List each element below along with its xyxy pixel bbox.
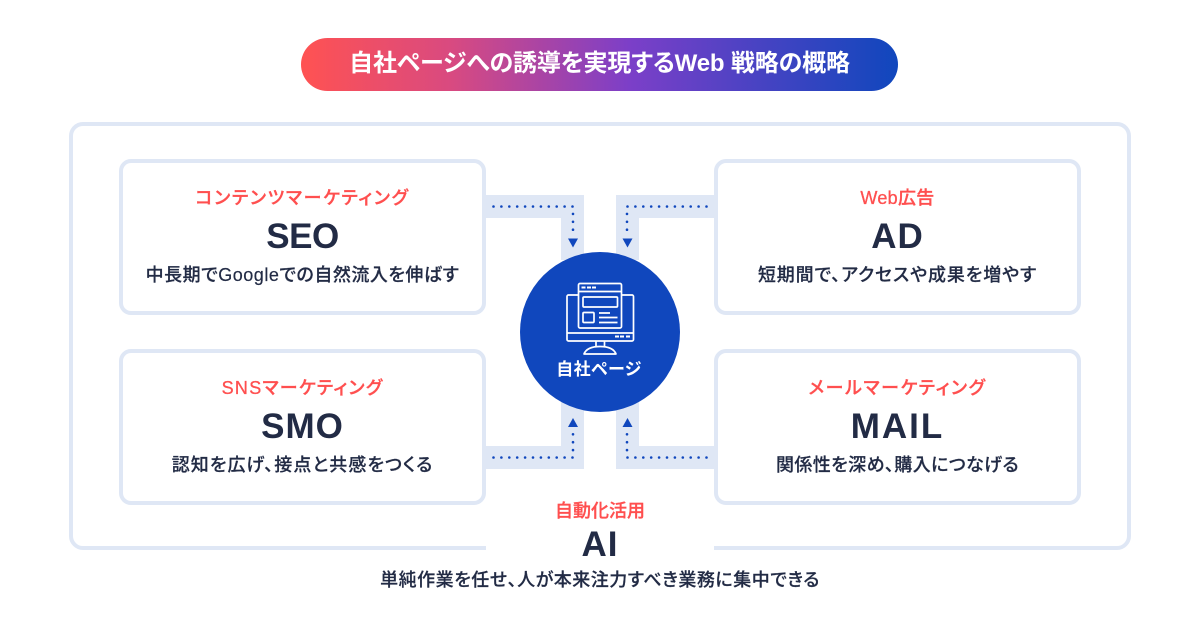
AI block bbox=[380, 501, 820, 590]
card: AD: Web広告 bbox=[860, 188, 935, 208]
card: SMO bbox=[119, 349, 486, 505]
card: SMO: SMO bbox=[261, 407, 344, 446]
card: SEO: 中長期でGoogleでの自然流入を伸ばす bbox=[146, 265, 459, 285]
card: SMO: 認知を広げ、接点と共感をつくる bbox=[172, 455, 433, 475]
AI description: 単純作業を任せ、人が本来注力すべき業務に集中できる bbox=[380, 570, 820, 590]
title pill: 自社ページへの誘導を実現するWeb 戦略の概略 bbox=[349, 50, 850, 77]
card: SMO: SNSマーケティング bbox=[222, 378, 383, 398]
card: MAIL: MAIL bbox=[851, 407, 944, 446]
frame gap bbox=[486, 543, 714, 553]
AI subtitle: 自動化活用 bbox=[555, 501, 645, 521]
outer frame panel bbox=[69, 122, 1131, 550]
icon: monitor with web page bbox=[566, 282, 634, 355]
card: AD: AD bbox=[871, 217, 924, 256]
card: AD: 短期間で、アクセスや成果を増やす bbox=[758, 265, 1037, 285]
center hub: own page bbox=[520, 252, 680, 412]
card: SEO: SEO bbox=[266, 217, 339, 256]
card: SEO: コンテンツマーケティング bbox=[195, 188, 410, 208]
card: MAIL bbox=[714, 349, 1081, 505]
title pill bbox=[301, 38, 898, 91]
card: AD bbox=[714, 159, 1081, 315]
card: SEO bbox=[119, 159, 486, 315]
card: MAIL: 関係性を深め、購入につなげる bbox=[776, 455, 1019, 475]
card: MAIL: メールマーケティング bbox=[808, 378, 987, 398]
hub label: 自社ページ bbox=[556, 360, 642, 379]
AI heading: AI bbox=[582, 525, 618, 564]
